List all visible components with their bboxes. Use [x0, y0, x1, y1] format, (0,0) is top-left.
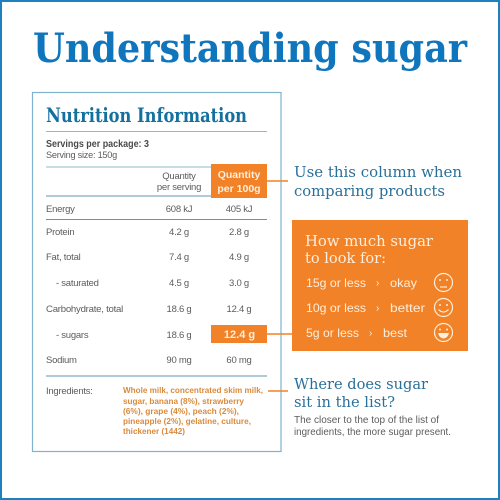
column header: quantity per 100g: per 100g	[217, 183, 261, 195]
column header: quantity per 100g: Quantity	[218, 169, 260, 181]
callout: where does sugar sit: Where does sugar	[294, 375, 429, 393]
row: energy: Energy	[46, 204, 75, 215]
row: carbohydrate: 18.6 g	[167, 304, 191, 315]
ingredients list: thickener (1442)	[123, 426, 185, 436]
arrow: sugars connector	[267, 333, 292, 335]
callout: where does sugar sit: sit in the list?	[294, 393, 395, 411]
row: protein	[46, 227, 249, 238]
row: protein: 4.2 g	[169, 227, 189, 238]
row: sugars: 18.6 g	[167, 330, 191, 341]
row: protein: 2.8 g	[229, 227, 249, 238]
row: best: best	[383, 326, 408, 340]
row: best	[306, 326, 408, 340]
icon: smiling face	[434, 298, 452, 316]
row: better: 10g or less	[306, 301, 366, 315]
callout description	[294, 415, 451, 438]
panel: how much sugar	[292, 220, 468, 351]
row: better	[306, 301, 425, 315]
row: fat: 4.9 g	[229, 252, 249, 263]
column header: quantity per 100g	[211, 164, 267, 198]
row: sugars: - sugars	[56, 330, 89, 341]
row: carbohydrate: 12.4 g	[227, 304, 251, 315]
row: carbohydrate	[46, 304, 251, 315]
icon: grinning face	[434, 324, 452, 342]
callout: use this column: Use this column when	[294, 163, 462, 181]
servings text: Serving size: 150g	[46, 150, 117, 161]
row: best: ›	[369, 328, 372, 339]
box heading: How much sugar	[305, 232, 434, 250]
row: protein: Protein	[46, 227, 74, 238]
row: energy	[46, 204, 253, 215]
callout description: ingredients, the more sugar present.	[294, 427, 451, 438]
callout: where does sugar sit	[294, 375, 429, 411]
callout description: The closer to the top of the list of	[294, 415, 439, 426]
row: okay: okay	[390, 276, 417, 290]
row: okay: ›	[376, 278, 379, 289]
row: sodium	[46, 355, 252, 366]
row: sodium: Sodium	[46, 355, 77, 366]
servings text	[46, 139, 149, 161]
row: carbohydrate: Carbohydrate, total	[46, 304, 123, 315]
row: fat: Fat, total	[46, 252, 81, 263]
row: better: better	[390, 301, 425, 315]
callout: use this column	[294, 163, 462, 200]
row: better: ›	[376, 303, 379, 314]
panel: nutrition information	[32, 92, 281, 452]
ingredients list: pineapple (2%), gelatine, culture,	[123, 416, 251, 426]
column header: quantity per serving	[157, 171, 201, 193]
row: saturated	[56, 278, 249, 289]
column header: quantity per serving: per serving	[157, 182, 201, 193]
row: best: 5g or less	[306, 326, 359, 340]
row: fat: 7.4 g	[169, 252, 189, 263]
row: saturated: - saturated	[56, 278, 99, 289]
row: fat	[46, 252, 249, 263]
ingredients list	[123, 385, 263, 436]
icon: neutral face	[434, 274, 452, 292]
row: sugars	[56, 325, 267, 343]
row: energy: 405 kJ	[226, 204, 253, 215]
row: energy: 608 kJ	[166, 204, 193, 215]
arrow: ingredients connector	[268, 390, 288, 392]
row: saturated: 3.0 g	[229, 278, 249, 289]
row: okay	[306, 276, 417, 290]
title: Understanding sugar	[33, 25, 468, 72]
box heading: to look for:	[305, 249, 386, 267]
ingredients list: (6%), grape (4%), peach (2%),	[123, 406, 239, 416]
column header: quantity per serving: Quantity	[162, 171, 196, 182]
box heading	[305, 232, 434, 267]
row: sodium: 90 mg	[166, 355, 192, 366]
ingredients label: Ingredients:	[46, 386, 93, 397]
ingredients list: Whole milk, concentrated skim milk,	[123, 385, 263, 395]
ingredients list: sugar, banana (8%), strawberry	[123, 396, 244, 406]
row: okay: 15g or less	[306, 276, 366, 290]
row: sodium: 60 mg	[226, 355, 252, 366]
servings text: Servings per package: 3	[46, 139, 149, 150]
row: saturated: 4.5 g	[169, 278, 189, 289]
arrow: column connector	[267, 180, 288, 182]
callout: use this column: comparing products	[294, 182, 445, 200]
row: sugars: 12.4 g	[224, 329, 255, 341]
panel heading: Nutrition Information	[46, 103, 247, 127]
